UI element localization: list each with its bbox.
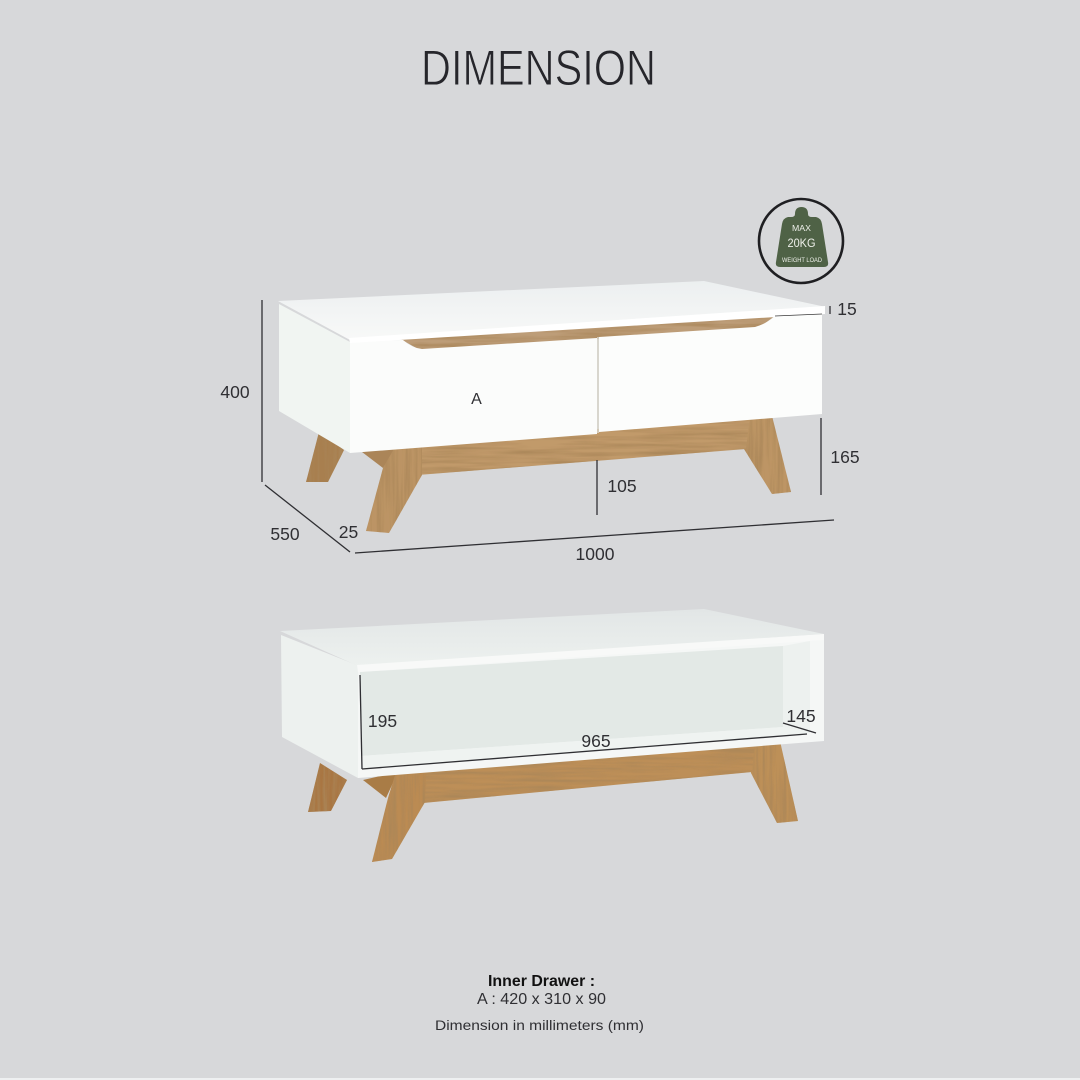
label: 165: 165: [830, 447, 860, 467]
dimension labels for closed table: [220, 299, 860, 564]
label: 25: 25: [339, 522, 358, 542]
left side panel: [281, 635, 359, 778]
label: width 1000: 1000: [576, 544, 615, 564]
label: depth 550: 550: [270, 524, 300, 544]
left drawer: [350, 338, 597, 453]
note: drawer A size: A : 420 x 310 x 90: [477, 991, 606, 1008]
drawer gap: [597, 337, 599, 433]
front left leg: [366, 445, 422, 533]
compartment floor: [361, 727, 810, 770]
drawer label A: A: [471, 391, 482, 408]
shadow under top: [775, 314, 822, 316]
right leg: [744, 416, 791, 494]
wood handle recess: [395, 312, 780, 350]
dimension lines for closed table: [262, 300, 834, 553]
icon: kettlebell weight: [776, 207, 828, 267]
front left leg: [372, 770, 426, 862]
back brace: [362, 446, 398, 468]
rear left leg: [306, 432, 344, 482]
table top: [278, 281, 826, 340]
badge text: 20kg: 20KG: [788, 238, 816, 250]
badge text: max: MAX: [792, 224, 812, 233]
inner drawer notes: [435, 973, 644, 1033]
label: 145: 145: [786, 706, 816, 726]
note: units: Dimension in millimeters (mm): [435, 1018, 644, 1033]
wood front rail: [410, 416, 750, 475]
title: DIMENSION: [421, 40, 656, 96]
right leg: [750, 741, 798, 823]
top front edge: [357, 634, 824, 672]
label: 105: 105: [607, 476, 637, 496]
rear left leg: [308, 763, 347, 812]
front frame: [358, 634, 824, 778]
compartment right wall: [783, 641, 810, 733]
label: 15: 15: [837, 299, 857, 319]
badge text: weight load: WEIGHT LOAD: [782, 258, 823, 264]
note heading: Inner Drawer :: [488, 973, 595, 990]
table: closed with drawers: [278, 281, 826, 533]
table top: [280, 609, 824, 666]
back of compartment: [360, 646, 783, 756]
right drawer: [599, 313, 822, 432]
back brace: [363, 772, 398, 798]
label: height 400: 400: [220, 382, 250, 402]
dimension lines for open table: [360, 675, 816, 769]
left side panel: [279, 304, 350, 453]
top front edge: [349, 306, 825, 343]
table: open compartment view: [280, 609, 824, 862]
dimension labels for open table: [368, 706, 816, 751]
icon: max weight load badge: [759, 199, 843, 283]
label: 965: 965: [581, 731, 611, 751]
label: 195: 195: [368, 711, 397, 731]
wood front rail: [415, 742, 755, 803]
